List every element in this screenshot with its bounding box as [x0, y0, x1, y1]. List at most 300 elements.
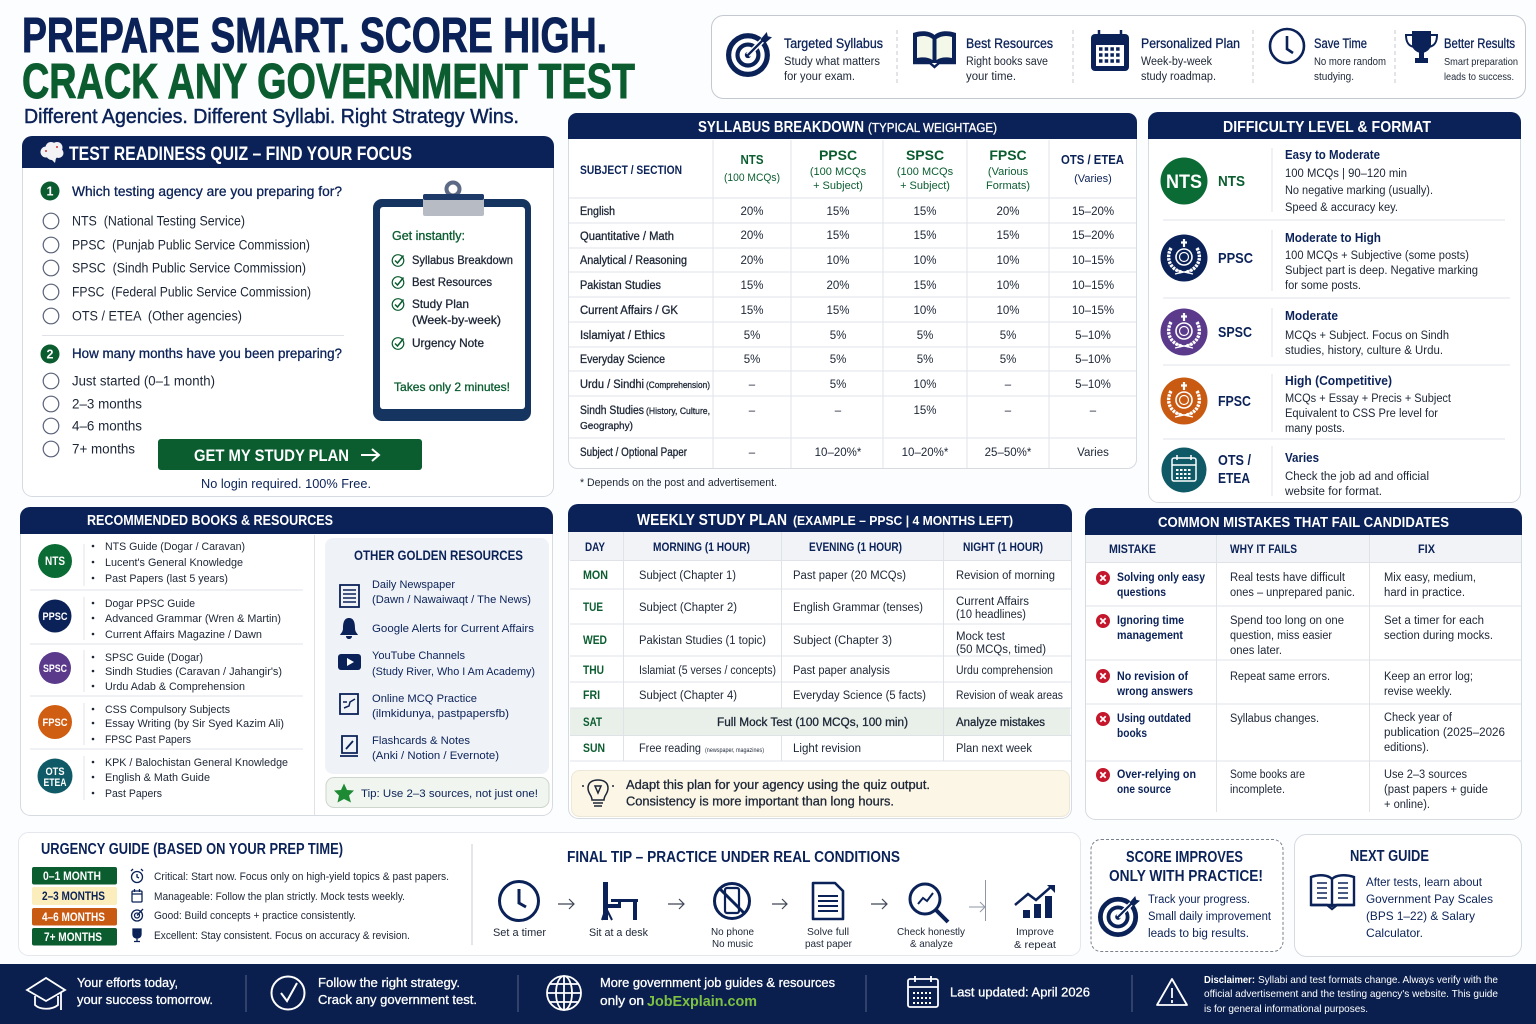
arrow	[772, 899, 787, 909]
table head: DAY	[585, 542, 605, 554]
step: solve paper: Solve full	[807, 926, 849, 938]
table rows: 15%	[913, 230, 937, 242]
icon: calendar	[1091, 30, 1129, 71]
step: set a timer: Set a timer	[493, 927, 546, 939]
icon: check	[272, 976, 304, 1010]
table rows: 10–15%	[1072, 305, 1114, 317]
row: OTS / ETEA: OTS /	[1218, 452, 1252, 469]
why it fails column: ones – unprepared panic.	[1230, 587, 1355, 599]
callout: Consistency is more important than long hours.	[626, 794, 894, 808]
table head: (Varies)	[1074, 173, 1112, 185]
error icons	[1096, 571, 1110, 782]
urgency pills: 7+ MONTHS	[44, 932, 102, 944]
row: OTS / ETEA: website for format.	[1284, 486, 1382, 498]
benefit: targeted syllabus: Targeted Syllabus	[784, 36, 883, 51]
row: SPSC: SPSC	[1218, 324, 1252, 341]
why it fails column: Spend too long on one	[1230, 615, 1344, 627]
question 2: How many months have you been preparing?	[72, 345, 342, 361]
fix column: Keep an error log;	[1384, 671, 1473, 683]
urgency pills: 2–3 MONTHS	[42, 891, 105, 903]
table rows: 5%	[1000, 354, 1016, 366]
panel: next guide: After tests, learn about	[1366, 875, 1483, 889]
message: more guides	[600, 975, 835, 1010]
table rows: 15–20%	[1072, 230, 1114, 242]
table rows: 20%	[740, 230, 764, 242]
panel: score improves: SCORE IMPROVES	[1126, 849, 1243, 866]
plan cells: Past paper (20 MCQs)	[793, 570, 906, 582]
plan cells: Light revision	[793, 743, 861, 755]
benefit: better results: leads to success.	[1444, 71, 1514, 83]
mistakes column: one source	[1117, 784, 1171, 796]
step: solve paper: past paper	[805, 938, 852, 950]
table rows: 20%	[740, 206, 764, 218]
why it fails column: Syllabus changes.	[1230, 713, 1319, 725]
row: PPSC: Moderate to High	[1285, 231, 1381, 245]
panel: next guide	[1294, 834, 1522, 956]
row: NTS	[1160, 148, 1433, 214]
benefit: personalized plan: study roadmap.	[1141, 71, 1216, 83]
disclaimer: Syllabi and test formats change. Always verify with the	[1258, 974, 1498, 986]
clipboard: Takes only 2 minutes!	[394, 380, 510, 394]
plan cells: Free reading	[639, 743, 701, 755]
urgency icons	[131, 869, 143, 942]
heading: syllabus	[698, 119, 997, 136]
row: SPSC: studies, history, culture & Urdu.	[1285, 345, 1443, 357]
table rows: –	[749, 405, 756, 417]
panel: other golden resources: Online MCQ Practice	[372, 693, 477, 705]
subtitle: Different Agencies. Different Syllabi. Right Strategy Wins.	[24, 105, 519, 128]
table rows: 5%	[830, 379, 846, 391]
row: NTS: NTS	[1166, 172, 1202, 193]
heading: weekly: WEEKLY STUDY PLAN	[637, 512, 787, 529]
table rows: 15%	[826, 230, 850, 242]
table rows: –	[749, 379, 756, 391]
benefit: save time: No more random	[1314, 56, 1386, 68]
button	[158, 439, 422, 470]
panel: other golden resources: (Study River, Who I Am Academy)	[372, 666, 535, 678]
table head: FPSC	[989, 147, 1027, 163]
panel: syllabus breakdown	[568, 113, 1137, 468]
panel: other golden resources: Google Alerts for Current Affairs	[372, 623, 535, 635]
benefit: personalized plan: Week-by-week	[1141, 56, 1212, 68]
urgency pills	[32, 867, 117, 946]
table rows: 10–15%	[1072, 280, 1114, 292]
row: NTS: Speed & accuracy key.	[1285, 202, 1398, 214]
table rows: –	[835, 405, 842, 417]
table rows: –	[749, 447, 756, 459]
books: SPSC: Sindh Studies (Caravan / Jahangir's)	[105, 666, 282, 678]
table head: NIGHT (1 HOUR)	[963, 542, 1043, 554]
tip: Tip: Use 2–3 sources, not just one!	[361, 788, 538, 800]
note: No login required. 100% Free.	[201, 476, 371, 491]
arrow	[558, 899, 574, 909]
row: OTS / ETEA	[1162, 448, 1429, 498]
panel: next guide: (BPS 1–22) & Salary	[1366, 909, 1475, 923]
table rows: 15%	[913, 405, 937, 417]
options for question 1: FPSC (Federal Public Service Commission)	[72, 284, 311, 300]
table rows: 5%	[830, 354, 846, 366]
row: SPSC: MCQs + Subject. Focus on Sindh	[1285, 330, 1449, 342]
table rows: (History, Culture,	[646, 406, 710, 417]
row: SPSC	[1160, 308, 1449, 357]
title: CRACK ANY GOVERNMENT TEST	[22, 55, 635, 109]
icon: book	[913, 31, 956, 67]
books: PPSC: Dogar PPSC Guide	[105, 598, 195, 610]
disclaimer: official advertisement and the testing agency's website. This guide	[1204, 988, 1498, 1000]
why it fails column: Some books are	[1230, 769, 1305, 781]
mistakes column: No revision of	[1117, 671, 1188, 683]
table rows: Subject / Optional Paper	[580, 447, 687, 459]
table rows: 5–10%	[1075, 330, 1111, 342]
step: check: Check honestly	[897, 926, 966, 938]
day labels: THU	[583, 665, 604, 677]
table rows: 5%	[917, 354, 933, 366]
books: FPSC: Essay Writing (by Sir Syed Kazim Ali)	[105, 718, 284, 730]
table head: FIX	[1418, 544, 1435, 556]
clipboard: Get instantly:	[392, 229, 465, 243]
fix column: section during mocks.	[1384, 630, 1493, 642]
urgency descriptions: Critical: Start now. Focus only on high-yield topics & past papers.	[154, 871, 449, 883]
icon: practice	[340, 694, 358, 714]
table rows	[580, 206, 1114, 459]
mistakes column: wrong answers	[1116, 686, 1193, 698]
question 2: 2	[47, 348, 54, 362]
table rows: –	[1090, 405, 1097, 417]
table rows: –	[1005, 379, 1012, 391]
row: FPSC	[1160, 374, 1452, 435]
message: more guides: only on	[600, 993, 644, 1008]
table rows: 15%	[996, 230, 1020, 242]
panel: next guide: NEXT GUIDE	[1350, 848, 1429, 865]
panel: recommended books	[20, 507, 553, 816]
table rows: 10–15%	[1072, 255, 1114, 267]
step: check: & analyze	[910, 938, 953, 950]
clipboard	[373, 182, 531, 421]
benefit: save time: studying.	[1314, 71, 1354, 83]
panel: difficulty level	[1148, 112, 1521, 502]
icon: newspaper	[340, 585, 359, 607]
plan cells	[639, 570, 1063, 755]
heading: final tip: FINAL TIP – PRACTICE UNDER REAL CONDITIONS	[567, 849, 900, 866]
table rows: Everyday Science	[580, 354, 665, 366]
step: sit at a desk: Sit at a desk	[589, 927, 648, 939]
benefit: best resources: your time.	[966, 71, 1016, 83]
table head	[580, 147, 1125, 192]
icon: globe	[547, 976, 581, 1010]
table rows: 20%	[826, 280, 850, 292]
table head: PPSC	[819, 147, 857, 163]
plan cells: Subject (Chapter 1)	[639, 570, 736, 582]
arrow	[969, 880, 986, 921]
table rows: 5%	[917, 330, 933, 342]
heading: books: RECOMMENDED BOOKS & RESOURCES	[87, 513, 333, 529]
step: check	[897, 884, 966, 950]
table head: (100 MCQs)	[724, 172, 780, 184]
panel: other golden resources: (ilmkidunya, pastpapersfb)	[372, 708, 509, 720]
plan cells: Full Mock Test (100 MCQs, 100 min)	[717, 717, 908, 729]
clipboard: Study Plan	[412, 297, 469, 311]
row: PPSC: Subject part is deep. Negative marking	[1285, 265, 1478, 277]
options for question 1	[43, 213, 311, 324]
urgency pills: 4–6 MONTHS	[42, 912, 105, 924]
table rows: Varies	[1077, 447, 1109, 459]
table head: WHY IT FAILS	[1230, 544, 1297, 556]
books: FPSC: FPSC Past Papers	[105, 734, 191, 746]
icon: target	[1100, 896, 1140, 935]
panel: other golden resources: Daily Newspaper	[372, 579, 455, 591]
table rows: –	[1005, 405, 1012, 417]
panel: other golden resources: (Dawn / Nawaiwaqt / The News)	[372, 594, 531, 606]
benefit: targeted syllabus: for your exam.	[784, 71, 855, 83]
icon: calendar	[908, 976, 938, 1007]
message: last updated: Last updated: April 2026	[950, 984, 1090, 1000]
books: NTS: NTS Guide (Dogar / Caravan)	[105, 541, 245, 553]
heading: difficulty: DIFFICULTY LEVEL & FORMAT	[1223, 119, 1431, 136]
books: NTS: Past Papers (last 5 years)	[105, 573, 228, 585]
books: SPSC: Urdu Adab & Comprehension	[105, 681, 245, 693]
table rows: 25–50%*	[985, 447, 1032, 459]
table head: SUBJECT / SECTION	[580, 163, 682, 177]
table head: + Subject)	[900, 180, 950, 192]
footer	[0, 964, 1536, 1024]
mistakes column: books	[1117, 728, 1147, 740]
books: FPSC: FPSC	[42, 717, 68, 729]
step: solve paper	[805, 883, 852, 950]
question 1: 1	[47, 184, 54, 198]
benefit: better results: Smart preparation	[1444, 56, 1518, 68]
table rows: Current Affairs / GK	[580, 305, 678, 317]
icon: target	[729, 32, 772, 74]
plan cells: Subject (Chapter 3)	[793, 635, 892, 647]
message: efforts	[77, 975, 213, 1007]
plan cells: Revision of morning	[956, 570, 1055, 582]
books: PPSC: PPSC	[42, 611, 68, 623]
benefit: best resources	[966, 36, 1053, 83]
mistakes column: management	[1117, 630, 1183, 642]
options for question 2: 4–6 months	[72, 418, 142, 434]
table head: SPSC	[906, 147, 944, 163]
day labels: MON	[583, 570, 608, 582]
heading: syllabus: (TYPICAL WEIGHTAGE)	[868, 121, 997, 135]
fix column	[1384, 572, 1505, 811]
table head: OTS / ETEA	[1061, 152, 1125, 167]
panel: other golden resources: (Anki / Notion / Evernote)	[372, 750, 499, 762]
table rows: 5%	[744, 354, 760, 366]
row: NTS: 100 MCQs | 90–120 min	[1285, 168, 1407, 180]
message: strategy: Follow the right strategy.	[318, 975, 460, 990]
options for question 2: Just started (0–1 month)	[72, 374, 215, 388]
clipboard: (Week-by-week)	[412, 313, 501, 327]
plan cells: Islamiat (5 verses / concepts)	[639, 665, 776, 677]
table rows: (Comprehension)	[646, 380, 710, 391]
icon: bulb	[582, 780, 614, 806]
books: SPSC: SPSC	[43, 663, 67, 675]
row: FPSC: many posts.	[1285, 423, 1345, 435]
heading: weekly: (EXAMPLE – PPSC | 4 MONTHS LEFT)	[793, 513, 1013, 528]
panel: other golden resources	[325, 538, 549, 774]
plan cells: Current Affairs	[956, 596, 1029, 608]
panel: score improves: Small daily improvement	[1148, 911, 1272, 923]
mistakes column: questions	[1117, 587, 1166, 599]
panel: other golden resources: Flashcards & Notes	[372, 735, 471, 747]
disclaimer	[1204, 974, 1498, 1015]
row: OTS / ETEA: ETEA	[1218, 470, 1250, 487]
table rows: 10%	[996, 255, 1020, 267]
panel: quiz	[22, 136, 554, 496]
table head: Formats)	[986, 180, 1030, 192]
step: set a timer	[493, 882, 546, 939]
plan cells: Mock test	[956, 631, 1006, 643]
table rows: 20%	[740, 255, 764, 267]
message: efforts: Your efforts today,	[77, 975, 178, 990]
mistakes column: Ignoring time	[1117, 615, 1184, 627]
fix column: Set a timer for each	[1384, 615, 1484, 627]
table rows: Pakistan Studies	[580, 280, 661, 292]
arrow	[668, 899, 684, 909]
mistakes column: Solving only easy	[1117, 572, 1206, 584]
books: OTS / ETEA: Past Papers	[105, 788, 162, 800]
plan cells: Subject (Chapter 2)	[639, 602, 737, 614]
row: OTS / ETEA: Varies	[1285, 451, 1319, 465]
table rows: 5%	[830, 330, 846, 342]
why it fails column: Real tests have difficult	[1230, 572, 1346, 584]
clipboard: Urgency Note	[412, 336, 484, 350]
books: NTS: NTS	[45, 556, 65, 568]
benefit: targeted syllabus	[784, 36, 883, 83]
why it fails column	[1230, 572, 1355, 796]
row: NTS: Easy to Moderate	[1285, 148, 1380, 162]
options for question 1: PPSC (Punjab Public Service Commission)	[72, 238, 310, 252]
table head	[585, 542, 1043, 554]
table rows: Analytical / Reasoning	[580, 255, 687, 267]
row: FPSC: MCQs + Essay + Precis + Subject	[1285, 393, 1452, 405]
table head: (100 MCQs	[897, 166, 954, 178]
icon: clock	[1270, 29, 1304, 63]
panel: other golden resources: YouTube Channels	[372, 650, 465, 662]
benefit: better results: Better Results	[1444, 36, 1515, 51]
row: FPSC: FPSC	[1218, 393, 1251, 410]
fix column: Check year of	[1384, 712, 1453, 724]
table head: EVENING (1 HOUR)	[809, 542, 902, 554]
question 1: Which testing agency are you preparing for?	[72, 183, 342, 199]
panel: next guide: Government Pay Scales	[1366, 892, 1493, 906]
benefit: targeted syllabus: Study what matters	[784, 56, 880, 68]
table rows: 20%	[996, 206, 1020, 218]
row: OTS / ETEA: Check the job ad and official	[1285, 471, 1429, 483]
fix column: (past papers + guide	[1384, 784, 1488, 796]
row: PPSC: 100 MCQs + Subjective (some posts)	[1285, 250, 1469, 262]
icon: trophy	[1406, 31, 1437, 63]
plan cells: Analyze mistakes	[956, 717, 1045, 729]
icon: flashcards	[340, 736, 358, 756]
table rows: 15%	[913, 206, 937, 218]
benefit: better results	[1444, 36, 1518, 83]
step: no phone	[711, 884, 754, 950]
table rows: Geography)	[580, 420, 633, 432]
table head: (Various	[988, 166, 1029, 178]
books: OTS / ETEA: KPK / Balochistan General Knowledge	[105, 757, 288, 769]
plan cells: Revision of weak areas	[956, 690, 1063, 702]
table rows: 10%	[913, 255, 937, 267]
table rows: 5–10%	[1075, 379, 1111, 391]
day labels	[583, 570, 608, 755]
table rows: 5%	[1000, 330, 1016, 342]
fix column: + online).	[1384, 799, 1430, 811]
table rows: 15%	[740, 280, 764, 292]
message: efforts: your success tomorrow.	[77, 992, 213, 1007]
books: PPSC: Current Affairs Magazine / Dawn	[105, 629, 262, 641]
why it fails column: question, miss easier	[1230, 630, 1332, 642]
plan cells: Past paper analysis	[793, 665, 890, 677]
tip	[326, 778, 549, 808]
table rows: 10%	[996, 280, 1020, 292]
books: OTS / ETEA: ETEA	[44, 777, 67, 789]
why it fails column: incomplete.	[1230, 784, 1285, 796]
plan cells: Everyday Science (5 facts)	[793, 690, 926, 702]
table rows: 10%	[913, 379, 937, 391]
icon: warning	[1157, 979, 1187, 1005]
plan cells: Subject (Chapter 4)	[639, 690, 737, 702]
step: improve: Improve	[1016, 926, 1054, 938]
table rows: 10%	[913, 305, 937, 317]
urgency pills: 0–1 MONTH	[43, 871, 101, 883]
table rows: 15%	[826, 206, 850, 218]
disclaimer: Disclaimer:	[1204, 974, 1255, 986]
panel: score improves: ONLY WITH PRACTICE!	[1109, 868, 1263, 885]
step: sit at a desk	[589, 882, 648, 939]
books: FPSC	[38, 704, 284, 746]
plan cells: Pakistan Studies (1 topic)	[639, 635, 766, 647]
benefit: best resources: Best Resources	[966, 36, 1053, 51]
books: FPSC: CSS Compulsory Subjects	[105, 704, 230, 716]
table rows: 10–20%*	[815, 447, 862, 459]
table head	[1109, 544, 1435, 556]
urgency descriptions	[154, 871, 449, 942]
message: more guides: More government job guides & resources	[600, 975, 835, 990]
panel: urgency and final tip	[18, 832, 1080, 956]
day labels: FRI	[583, 690, 600, 702]
day labels: SUN	[583, 743, 605, 755]
table rows: Sindh Studies	[580, 405, 644, 417]
table rows: Quantitative / Math	[580, 231, 674, 243]
urgency descriptions: Excellent: Stay consistent. Focus on accuracy & revision.	[154, 930, 410, 942]
step: no phone: No phone	[711, 926, 754, 938]
table rows: 10%	[996, 305, 1020, 317]
table rows: 15%	[913, 280, 937, 292]
table rows: 10%	[826, 255, 850, 267]
panel: weekly study plan	[568, 504, 1072, 818]
benefit: save time	[1314, 36, 1386, 83]
table head: (100 MCQs	[810, 166, 867, 178]
benefit: best resources: Right books save	[966, 56, 1048, 68]
fix column: revise weekly.	[1384, 686, 1452, 698]
books: PPSC	[38, 598, 281, 641]
benefit: personalized plan: Personalized Plan	[1141, 36, 1240, 51]
mistakes column: Using outdated	[1117, 713, 1191, 725]
options for question 2	[43, 373, 215, 457]
books: OTS / ETEA: OTS	[46, 766, 64, 778]
icon: video	[338, 654, 361, 670]
plan cells: (50 MCQs, timed)	[956, 644, 1046, 656]
books: SPSC: SPSC Guide (Dogar)	[105, 652, 203, 664]
callout	[572, 770, 1070, 816]
options for question 1: SPSC (Sindh Public Service Commission)	[72, 260, 306, 276]
fix column: hard in practice.	[1384, 587, 1465, 599]
table rows: 15–20%	[1072, 206, 1114, 218]
row: SPSC: Moderate	[1285, 309, 1338, 323]
why it fails column: ones later.	[1230, 645, 1282, 657]
step: improve	[1014, 885, 1056, 951]
